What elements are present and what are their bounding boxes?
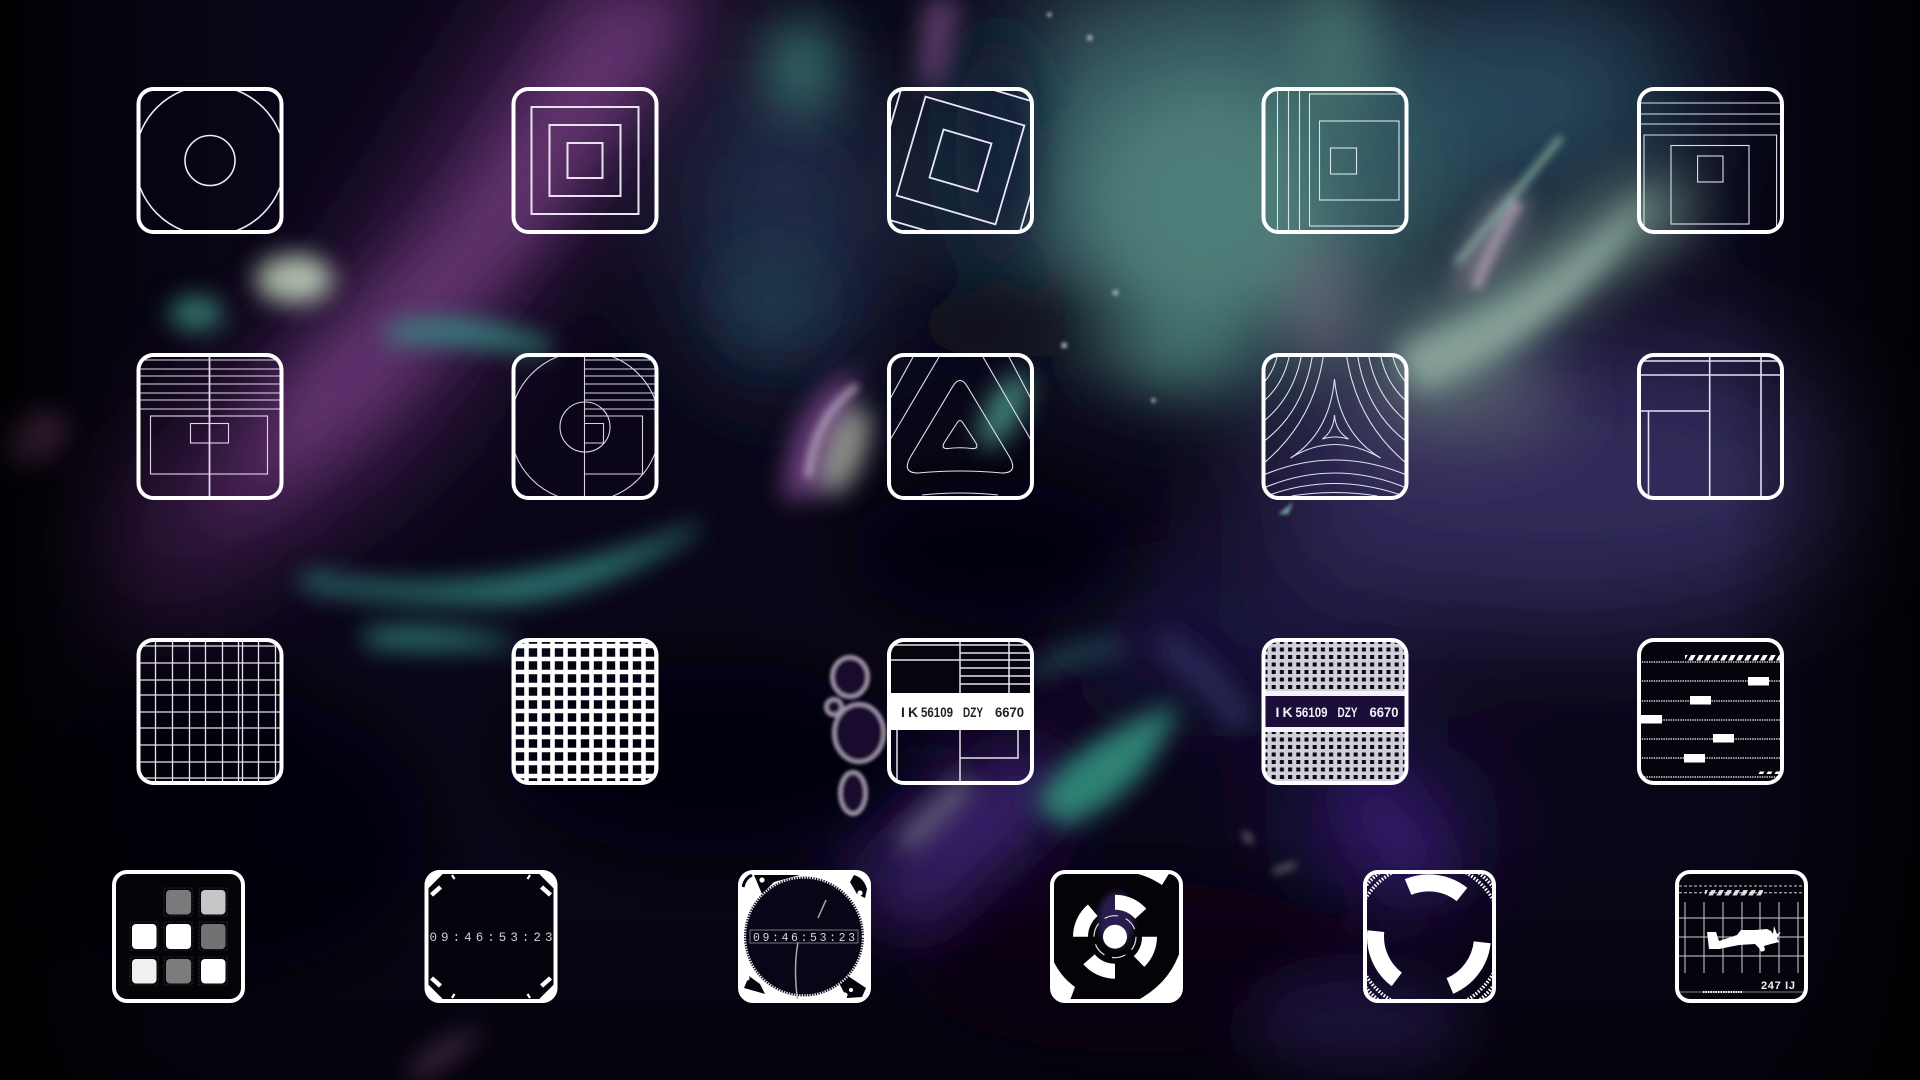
icon: rotated squares	[887, 87, 1034, 234]
icon: lined panel with split rectangles	[136, 353, 284, 500]
icon: timecode frame	[426, 872, 556, 1001]
text: code on dark band	[1276, 708, 1398, 717]
text: code on dark band: 6670	[1370, 704, 1399, 720]
text: code on dark band: K	[1282, 704, 1293, 720]
text: code on white band: I	[901, 704, 905, 720]
icon: timeline bars	[1637, 640, 1784, 783]
text: readout: 247 IJ	[1761, 980, 1795, 992]
icon: thick grid	[512, 638, 658, 785]
icon: half circle half lined panel	[510, 352, 660, 502]
icon: rounded triangles	[889, 355, 1032, 498]
icon: concentric squares	[514, 89, 656, 232]
icon: timecode dial	[738, 870, 871, 1003]
text: timecode in dial: 09:46:53:23	[753, 932, 855, 945]
icon: squares with horizontal lines	[1637, 89, 1784, 234]
text: code on dark band: DZY	[1338, 704, 1358, 720]
icon: panel with white code band	[887, 638, 1034, 785]
text: code on dark band: 56109	[1296, 704, 1328, 720]
text: code on white band: K	[908, 704, 918, 720]
text: code on dark band: I	[1276, 704, 1279, 720]
text: code on white band	[902, 708, 1024, 717]
icon: dotted panel with dark code band	[1262, 638, 1408, 785]
text: code on white band: DZY	[963, 704, 983, 720]
text: code on white band: 56109	[921, 704, 953, 720]
icon: circle in circle	[135, 86, 285, 236]
icon: triangular contour lines	[1262, 355, 1408, 498]
icon: aircraft tracker	[1677, 872, 1806, 1001]
bubbles: cluster of droplets	[826, 657, 884, 814]
specks: small debris points	[1047, 12, 1293, 514]
icon: segmented wheel	[1050, 870, 1183, 1003]
icon: thin grid	[136, 638, 284, 785]
icon: button matrix	[114, 872, 243, 1001]
icon: aircraft silhouette	[1707, 926, 1781, 952]
icon: layout panels	[1637, 353, 1784, 500]
icon: ring segments	[1363, 870, 1496, 1003]
icon: squares with vertical lines	[1264, 87, 1406, 234]
text: timecode: 09:46:53:23	[430, 931, 552, 945]
text: code on white band: 6670	[995, 704, 1024, 720]
